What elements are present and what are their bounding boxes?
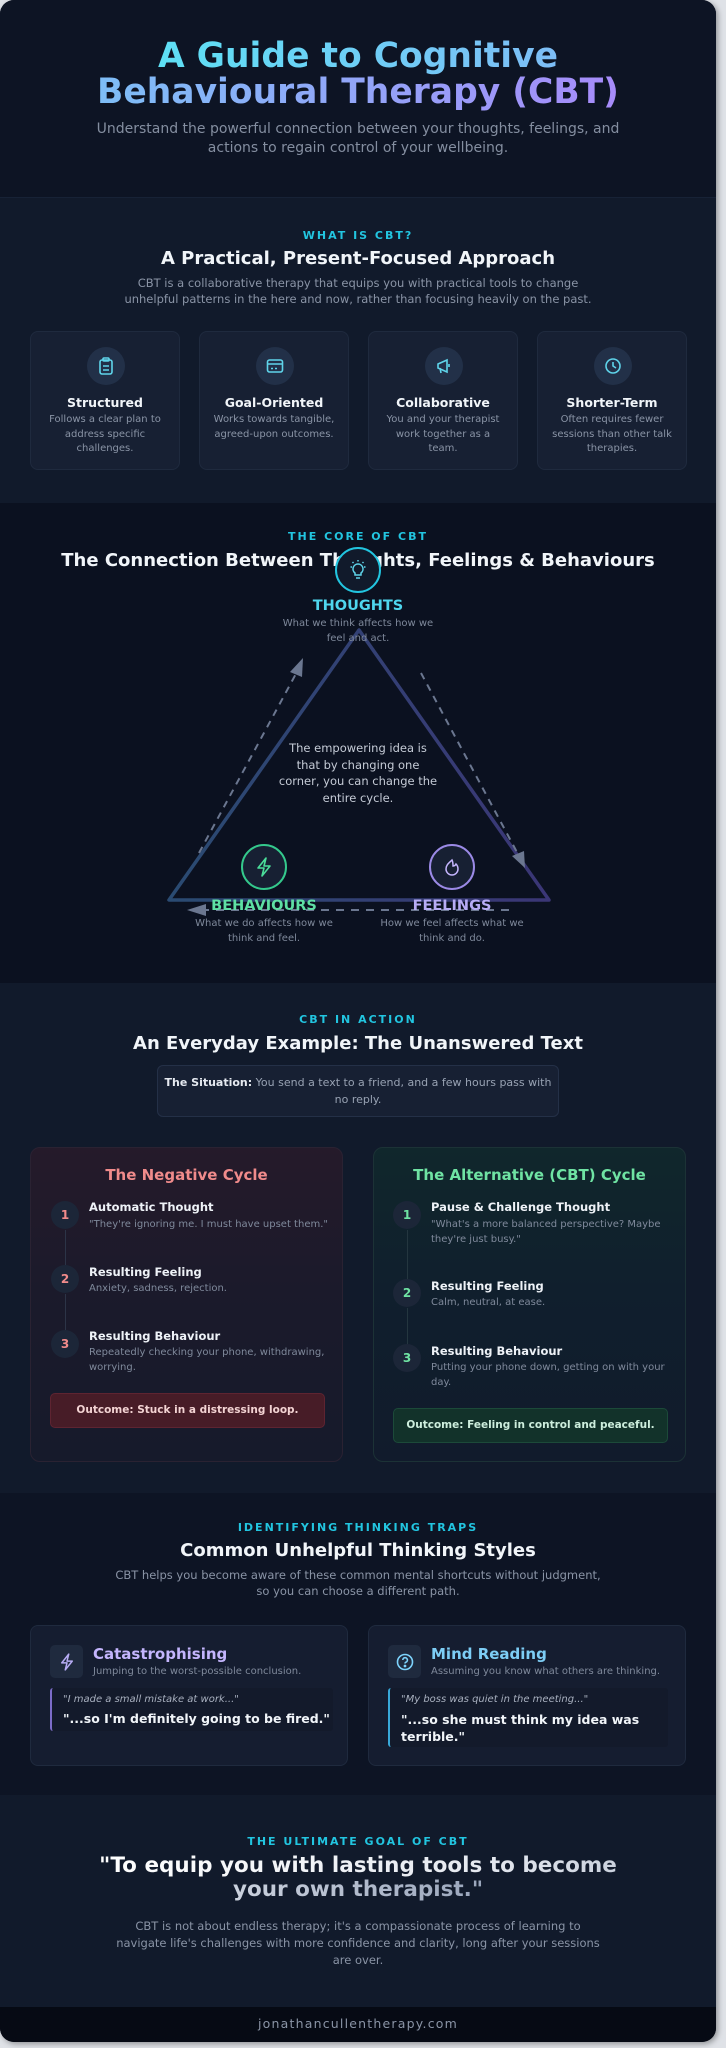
icon: heart-flame [429, 844, 475, 890]
panel: alternative cycle [373, 1147, 686, 1462]
card: goal-oriented: agreed-upon outcomes. [214, 428, 334, 440]
node: thoughts: What we think affects how we [283, 618, 433, 629]
icon: megaphone [425, 347, 463, 385]
node: behaviours: What we do affects how we [195, 918, 333, 929]
outcome: negative: Outcome: Stuck in a distressing loop. [76, 1404, 299, 1416]
card: collaborative: team. [428, 443, 458, 454]
intro text: so you can choose a different path. [256, 1584, 460, 1598]
quote: "...so she must think my idea was terrible." [401, 1712, 639, 1744]
closing text: navigate life's challenges with more confidence and clarity, long after your sessions [116, 1936, 600, 1950]
card: collaborative [368, 331, 518, 470]
card: shorter-term: therapies. [587, 443, 637, 454]
step 3 [393, 1344, 421, 1372]
node: behaviours: think and feel. [228, 932, 300, 944]
step 2 [393, 1279, 421, 1307]
arrow: feelings to behaviours [187, 904, 509, 916]
arrow: behaviours to thoughts [199, 658, 303, 853]
quote: "I made a small mistake at work..." [63, 1694, 239, 1705]
card: structured [30, 331, 180, 470]
step 3: 3 [61, 1337, 69, 1351]
step 1: 1 [403, 1208, 411, 1222]
section: CBT in action [0, 983, 716, 1493]
header section [0, 0, 716, 197]
quote [388, 1688, 668, 1747]
section: core of CBT [0, 503, 716, 983]
card: structured: challenges. [77, 443, 133, 454]
situation box: no reply. [335, 1093, 381, 1106]
heading: Common Unhelpful Thinking Styles [180, 1540, 536, 1561]
intro text [124, 276, 592, 306]
node: feelings [380, 844, 524, 944]
step 2 [51, 1265, 79, 1293]
heading: A Practical, Present-Focused Approach [161, 248, 555, 269]
section label: IDENTIFYING THINKING TRAPS [238, 1521, 478, 1534]
icon: lightning [241, 844, 287, 890]
icon: lightning [50, 1645, 83, 1678]
closing text: CBT is not about endless therapy; it's a compassionate process of learning to [135, 1919, 581, 1933]
panel: negative cycle [30, 1147, 343, 1462]
title: Behavioural Therapy (CBT) [97, 72, 619, 112]
subtitle: actions to regain control of your wellbeing. [208, 140, 508, 156]
panel: negative cycle: Resulting Behaviour [89, 1329, 220, 1343]
outcome: negative [50, 1393, 325, 1428]
footer: jonathancullentherapy.com [258, 2016, 458, 2031]
section label: CBT IN ACTION [299, 1013, 417, 1026]
heading: An Everyday Example: The Unanswered Text [133, 1033, 583, 1054]
icon: clipboard [87, 347, 125, 385]
card: mind reading: Assuming you know what others are thinking. [431, 1666, 660, 1677]
section: what is CBT [0, 197, 716, 503]
card: mind reading [368, 1625, 686, 1766]
quote: your own therapist." [233, 1877, 483, 1902]
step 3 [51, 1330, 79, 1358]
node: behaviours: BEHAVIOURS [211, 898, 317, 914]
panel title: The Negative Cycle [105, 1166, 268, 1184]
card: collaborative: You and your therapist [386, 414, 499, 425]
node: feelings: How we feel affects what we [380, 918, 524, 929]
outcome: positive [393, 1408, 668, 1443]
quote [99, 1853, 617, 1902]
card: goal-oriented [199, 331, 349, 470]
subtitle [97, 121, 619, 156]
quote: "To equip you with lasting tools to become [99, 1853, 617, 1878]
card: collaborative: work together as a [396, 428, 490, 440]
card: shorter-term [537, 331, 687, 470]
closing text [116, 1919, 600, 1967]
triangle diagram [167, 628, 551, 916]
card: goal-oriented: Goal-Oriented [225, 395, 323, 410]
node: feelings: think and do. [419, 932, 485, 944]
panel: alternative cycle: "What's a more balanced perspective? Maybe they're just busy." [431, 1219, 661, 1245]
quote [50, 1688, 333, 1731]
panel: alternative cycle: Pause & Challenge Thought [431, 1200, 610, 1214]
card: shorter-term: sessions than other talk [552, 428, 672, 440]
outcome: positive: Outcome: Feeling in control and peaceful. [406, 1419, 655, 1431]
footer [0, 2007, 716, 2042]
intro text: CBT is a collaborative therapy that equips you with practical tools to change [138, 276, 578, 290]
situation box [157, 1065, 559, 1117]
card: goal-oriented: Works towards tangible, [214, 414, 334, 425]
node: feelings: FEELINGS [413, 898, 491, 914]
card: shorter-term: Shorter-Term [566, 395, 658, 410]
intro text [115, 1568, 601, 1598]
panel: alternative cycle: Resulting Behaviour [431, 1344, 562, 1358]
title: A Guide to Cognitive [158, 36, 558, 76]
node: thoughts: feel and act. [327, 632, 389, 644]
section: thinking traps [0, 1493, 716, 1795]
intro text: unhelpful patterns in the here and now, rather than focusing heavily on the past. [124, 292, 592, 306]
intro text: CBT helps you become aware of these common mental shortcuts without judgment, [115, 1568, 601, 1582]
step 1 [393, 1201, 421, 1229]
card: catastrophising: Jumping to the worst-possible conclusion. [93, 1666, 301, 1677]
card: structured: Follows a clear plan to [49, 414, 161, 425]
section label: WHAT IS CBT? [303, 229, 413, 242]
heading: The Connection Between Thoughts, Feelings & Behaviours [61, 550, 655, 571]
icon: clock [594, 347, 632, 385]
step 1 [51, 1201, 79, 1229]
card: collaborative: Collaborative [396, 395, 490, 410]
icon: card [256, 347, 294, 385]
quote: "...so I'm definitely going to be fired." [63, 1711, 330, 1726]
card: structured: Structured [67, 395, 143, 410]
icon: lightbulb [335, 547, 381, 593]
panel: alternative cycle: Calm, neutral, at ease. [431, 1297, 545, 1308]
card: structured: address specific [65, 428, 145, 440]
panel: negative cycle: "They're ignoring me. I must have upset them." [89, 1219, 328, 1230]
step 2: 2 [403, 1286, 411, 1300]
panel: alternative cycle: Putting your phone down, getting on with your day. [431, 1362, 665, 1388]
node: behaviours [195, 844, 333, 944]
card: catastrophising [30, 1625, 348, 1766]
step 2: 2 [61, 1272, 69, 1286]
panel: negative cycle: Anxiety, sadness, rejection. [89, 1283, 227, 1294]
panel: negative cycle: Resulting Feeling [89, 1265, 202, 1279]
quote: "My boss was quiet in the meeting..." [401, 1694, 588, 1705]
card: shorter-term: Often requires fewer [561, 414, 663, 425]
center text: The empowering idea is that by changing one corner, you can change the entire cycle. [279, 741, 437, 804]
node: thoughts [283, 547, 433, 644]
title [97, 36, 619, 112]
section label: THE CORE OF CBT [288, 530, 428, 543]
situation box: The Situation: You send a text to a friend, and a few hours pass with [165, 1076, 551, 1089]
node: thoughts: THOUGHTS [313, 598, 403, 614]
panel: negative cycle: Automatic Thought [89, 1200, 214, 1214]
arrow: thoughts to feelings [421, 673, 525, 868]
section: ultimate goal [0, 1795, 716, 2007]
step 1: 1 [61, 1208, 69, 1222]
section label: THE ULTIMATE GOAL OF CBT [247, 1835, 469, 1848]
panel: negative cycle: Repeatedly checking your phone, withdrawing, worrying. [89, 1347, 324, 1373]
closing text: are over. [333, 1953, 383, 1967]
icon: question [388, 1645, 421, 1678]
panel title: The Alternative (CBT) Cycle [413, 1166, 646, 1184]
panel: alternative cycle: Resulting Feeling [431, 1279, 544, 1293]
step 3: 3 [403, 1351, 411, 1365]
card: catastrophising: Catastrophising [93, 1645, 227, 1663]
subtitle: Understand the powerful connection between your thoughts, feelings, and [97, 121, 619, 137]
card: mind reading: Mind Reading [431, 1645, 547, 1663]
triangle outline [169, 630, 549, 900]
